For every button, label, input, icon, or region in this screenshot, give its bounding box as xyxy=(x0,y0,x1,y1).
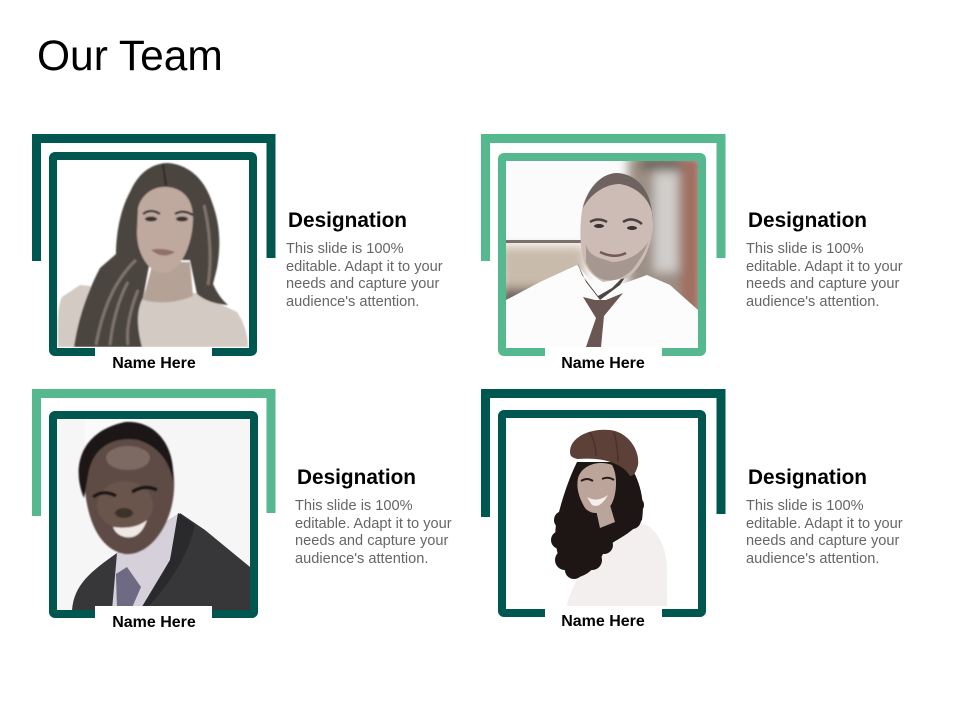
designation text 4: Designation xyxy=(748,466,867,489)
name label 3: Name Here xyxy=(112,614,196,631)
designation text 2 xyxy=(746,209,903,310)
name label 2: Name Here xyxy=(561,355,645,372)
designation text 1: Designation xyxy=(288,209,407,232)
designation text 4: audience's attention. xyxy=(746,551,879,567)
designation text 3: needs and capture your xyxy=(295,533,448,549)
name label 3 xyxy=(95,606,212,634)
designation text 4: This slide is 100% xyxy=(746,498,864,514)
name label 4 xyxy=(545,606,662,633)
designation text 1: This slide is 100% xyxy=(286,241,404,257)
designation text 3: editable. Adapt it to your xyxy=(295,516,452,532)
panel: team member 4 xyxy=(481,389,903,633)
designation text 4: needs and capture your xyxy=(746,533,899,549)
panel: team member 2 xyxy=(481,134,903,375)
designation text 1: audience's attention. xyxy=(286,294,419,310)
inner frame 3 xyxy=(53,415,254,614)
designation text 3: audience's attention. xyxy=(295,551,428,567)
designation text 3 xyxy=(295,466,452,567)
photo: woman in brown cap xyxy=(551,430,667,606)
designation text 2: needs and capture your xyxy=(746,276,899,292)
outer bracket 3 xyxy=(32,389,276,516)
outer bracket 2 xyxy=(481,134,726,261)
designation text 3: This slide is 100% xyxy=(295,498,413,514)
designation text 4: editable. Adapt it to your xyxy=(746,516,903,532)
designation text 4 xyxy=(746,466,903,567)
inner frame 1 xyxy=(53,156,253,352)
photo: woman with long wavy hair xyxy=(58,163,248,347)
designation text 2: audience's attention. xyxy=(746,294,879,310)
name label 1 xyxy=(95,347,212,375)
designation text 2: This slide is 100% xyxy=(746,241,864,257)
name label 1: Name Here xyxy=(112,355,196,372)
photo: man in dark suit xyxy=(57,419,250,610)
panel: team member 1 xyxy=(32,134,443,375)
outer bracket 1 xyxy=(32,134,276,261)
title: Our Team xyxy=(37,33,223,80)
designation text 1 xyxy=(286,209,443,310)
designation text 2: editable. Adapt it to your xyxy=(746,259,903,275)
name label 2 xyxy=(545,347,662,375)
designation text 3: Designation xyxy=(297,466,416,489)
panel: team member 3 xyxy=(32,389,452,634)
photo: man with shirt and tie xyxy=(500,155,703,347)
inner frame 2 xyxy=(502,157,702,352)
name label 4: Name Here xyxy=(561,613,645,630)
designation text 1: editable. Adapt it to your xyxy=(286,259,443,275)
designation text 1: needs and capture your xyxy=(286,276,439,292)
inner frame 4 xyxy=(502,414,702,613)
designation text 2: Designation xyxy=(748,209,867,232)
outer bracket 4 xyxy=(481,389,726,517)
